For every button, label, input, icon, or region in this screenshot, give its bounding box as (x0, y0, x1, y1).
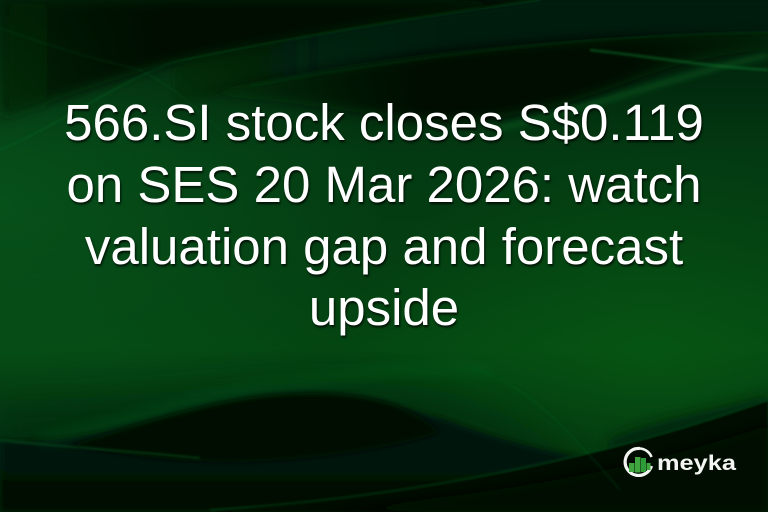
title: 566.SI stock closes S$0.119 (64, 94, 704, 151)
title (64, 94, 704, 338)
wordmark: meyka (657, 452, 736, 475)
title: on SES 20 Mar 2026: watch (66, 156, 702, 213)
title: upside (309, 279, 459, 336)
logo: meyka (624, 446, 736, 477)
icon: ring with green bars (625, 448, 652, 475)
title: valuation gap and forecast (85, 218, 683, 275)
dark dome wave (70, 393, 440, 462)
